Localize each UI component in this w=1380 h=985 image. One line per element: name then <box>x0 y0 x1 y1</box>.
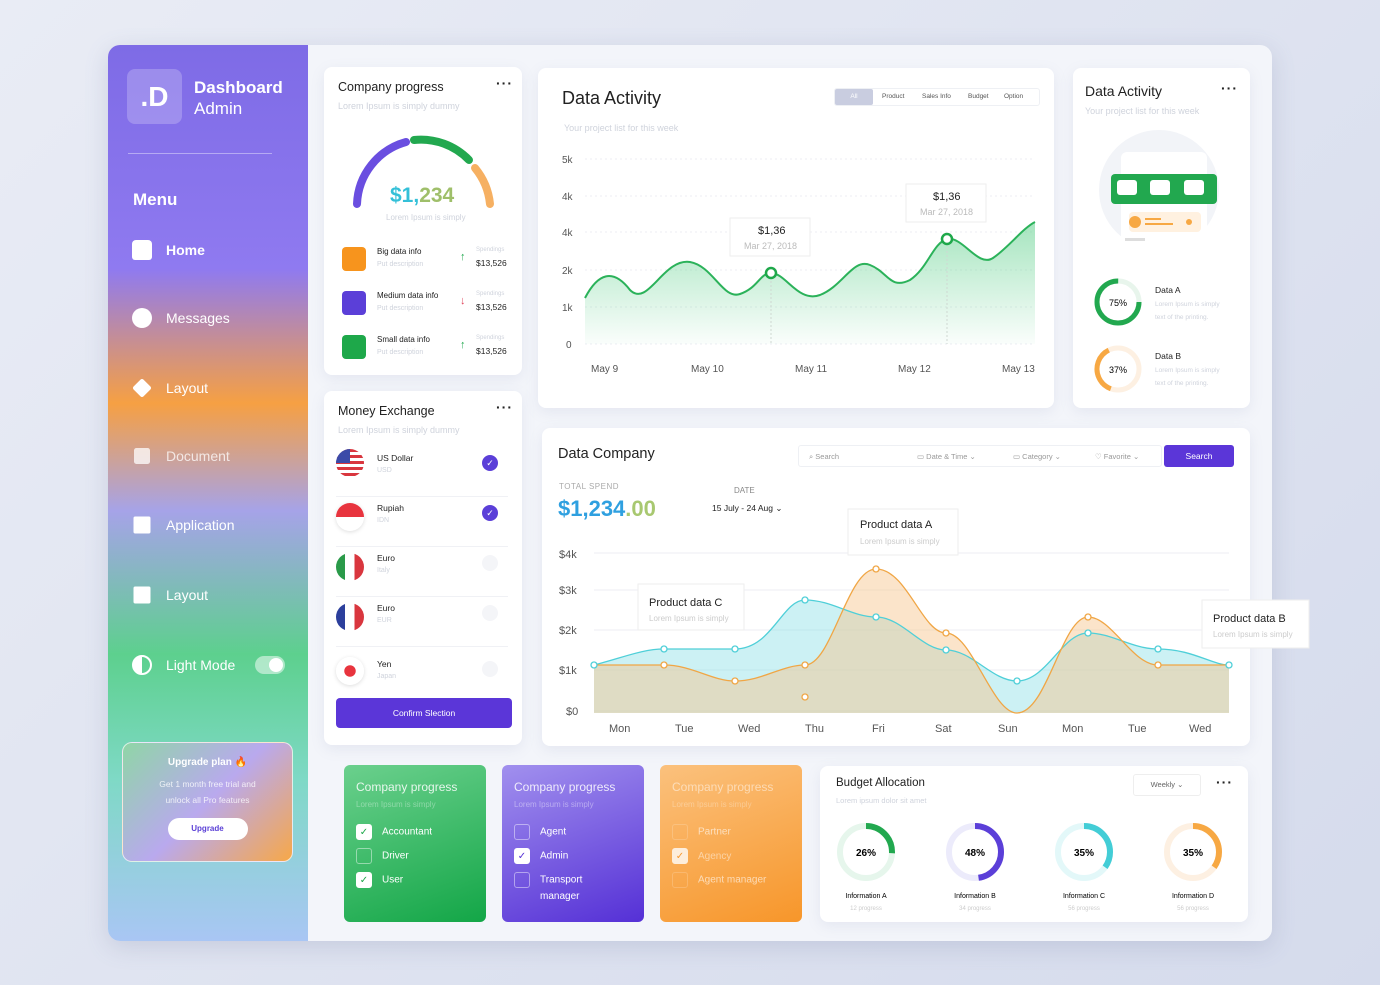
area chart: Thu <box>805 723 824 735</box>
panel: money exchange: ✓ <box>486 458 494 468</box>
text: Mar 27, 2018 <box>920 207 973 217</box>
panel: budget allocation: Budget Allocation <box>836 777 925 789</box>
search bar <box>798 445 1162 467</box>
menu item application <box>134 516 234 534</box>
list items: ↓ <box>460 295 466 307</box>
panel: budget allocation: Information D <box>1172 893 1214 900</box>
card: company progress purple: ✓ <box>518 851 526 862</box>
text: May 11 <box>795 364 827 375</box>
donut data B: 37% <box>1109 365 1127 375</box>
upgrade card: Upgrade plan 🔥 <box>168 757 247 768</box>
panel: data activity illustration: ··· <box>1221 80 1238 96</box>
text: 0 <box>566 340 572 351</box>
list items: Medium data info <box>377 291 438 300</box>
panel: budget allocation: Information A <box>845 893 887 900</box>
confirm button: Confirm Slection <box>393 708 455 718</box>
brand text: Dashboard <box>194 78 283 97</box>
gauge <box>353 136 494 208</box>
menu item home: Home <box>166 242 205 258</box>
panel: data company: DATE <box>734 486 755 495</box>
area chart: Sat <box>935 723 952 735</box>
panel: money exchange: IDN <box>377 517 389 524</box>
area chart: Wed <box>738 723 760 735</box>
list items: $13,526 <box>476 258 507 268</box>
panel: budget allocation: 26% <box>856 848 876 859</box>
card: company progress purple <box>502 765 644 922</box>
panel: budget allocation: Information B <box>954 893 996 900</box>
menu item light mode: Light Mode <box>166 657 235 673</box>
panel: company progress: ··· <box>496 75 513 91</box>
panel: data activity chart <box>538 68 1054 408</box>
logo: .D <box>140 81 168 112</box>
area chart: Wed <box>1189 723 1211 735</box>
panel: company progress: Lorem Ipsum is simply dummy <box>338 101 460 111</box>
area chart: Tue <box>675 723 694 735</box>
search bar: ▭ Category ⌄ <box>1013 452 1061 461</box>
card: company progress purple: Admin <box>540 851 568 862</box>
tabs <box>834 88 1040 106</box>
panel: money exchange: USD <box>377 467 392 474</box>
list items: $13,526 <box>476 346 507 356</box>
confirm button <box>336 698 512 728</box>
text: 5k <box>562 155 574 166</box>
menu item document <box>134 448 230 464</box>
panel: data company: Data Company <box>558 446 655 462</box>
list items <box>342 246 507 359</box>
card: company progress orange: ✓ <box>676 851 684 862</box>
panel: budget allocation: 56 progress <box>1068 906 1100 912</box>
card: company progress purple: manager <box>540 891 579 902</box>
text: 2k <box>562 266 574 277</box>
card: company progress orange: Agency <box>698 851 731 862</box>
panel: company progress: Lorem Ipsum is simply <box>386 213 466 222</box>
area chart: Product data B <box>1213 613 1286 625</box>
text: $1,36 <box>758 225 786 237</box>
text: 1k <box>562 303 574 314</box>
panel: money exchange: Lorem Ipsum is simply dummy <box>338 425 460 435</box>
panel: budget allocation: 35% <box>1074 848 1094 859</box>
panel: money exchange <box>324 391 522 745</box>
panel: money exchange: Yen <box>377 659 391 669</box>
panel: company progress: $1,234 <box>390 184 454 207</box>
panel: money exchange: US Dollar <box>377 453 413 463</box>
card: company progress orange: Company progress <box>672 780 773 794</box>
panel: money exchange: Japan <box>377 673 396 680</box>
panel: money exchange: ··· <box>496 399 513 415</box>
upgrade card: Upgrade <box>191 824 224 833</box>
panel: data activity illustration: Data B <box>1155 351 1181 361</box>
panel: budget allocation: 56 progress <box>1177 906 1209 912</box>
panel: money exchange: Rupiah <box>377 503 404 513</box>
panel: data activity illustration: Lorem Ipsum is simply <box>1155 301 1220 308</box>
panel: company progress: Company progress <box>338 80 444 94</box>
area chart: Product data C <box>649 597 722 609</box>
tabs: Option <box>1004 93 1023 100</box>
list items: ↑ <box>460 339 466 351</box>
sidebar <box>108 45 308 941</box>
illustration <box>1099 130 1219 241</box>
panel: budget allocation: ··· <box>1216 774 1233 790</box>
menu item messages <box>132 308 230 328</box>
donut data A <box>1094 278 1142 326</box>
list items: Put description <box>377 305 423 312</box>
panel: money exchange: Euro <box>377 553 395 563</box>
menu item application: Application <box>166 517 234 533</box>
menu item home <box>132 240 205 260</box>
panel: data company: 15 July - 24 Aug ⌄ <box>712 503 782 513</box>
panel: money exchange: EUR <box>377 617 392 624</box>
list items: Spendings <box>476 291 504 297</box>
list items: Small data info <box>377 335 430 344</box>
panel: company progress <box>324 67 522 375</box>
area chart: $1k <box>559 665 577 677</box>
panel: data company <box>542 428 1250 746</box>
logo <box>127 69 182 124</box>
panel: data activity illustration <box>1073 68 1250 408</box>
list items: ↑ <box>460 251 466 263</box>
card: company progress orange <box>660 765 802 922</box>
panel: budget allocation <box>820 766 1248 922</box>
card: company progress purple: Transport <box>540 875 582 886</box>
panel: money exchange: Italy <box>377 567 390 574</box>
area chart: Lorem Ipsum is simply <box>649 614 729 623</box>
area chart: Mon <box>609 723 630 735</box>
main container <box>108 45 1272 941</box>
panel: budget allocation: Weekly ⌄ <box>1151 780 1183 789</box>
panel: data company: Search <box>1186 451 1212 461</box>
panel: money exchange: Euro <box>377 603 395 613</box>
card: company progress green: ✓ <box>360 875 368 886</box>
panel: budget allocation: Information C <box>1063 893 1105 900</box>
text: May 12 <box>898 364 931 375</box>
menu heading: Menu <box>133 190 177 209</box>
text: $1,36 <box>933 191 961 203</box>
card: company progress orange: Partner <box>698 827 731 838</box>
list items: Spendings <box>476 247 504 253</box>
panel: budget allocation: 34 progress <box>959 906 991 912</box>
brand text: Admin <box>194 99 242 118</box>
list items: Big data info <box>377 247 421 256</box>
area chart: $0 <box>566 706 578 718</box>
area chart <box>559 508 1310 735</box>
tabs: Budget <box>968 93 989 100</box>
panel: budget allocation: Lorem ipsum dolor sit amet <box>836 796 926 805</box>
menu item document: Document <box>166 448 230 464</box>
menu item layout 2: Layout <box>166 587 208 603</box>
panel: money exchange: ✓ <box>486 508 494 518</box>
text: May 9 <box>591 364 619 375</box>
list items: Put description <box>377 261 423 268</box>
brand text <box>194 78 283 118</box>
area chart: Product data A <box>860 519 933 531</box>
card: company progress green: Driver <box>382 851 409 862</box>
card: company progress green <box>344 765 486 922</box>
panel: data activity chart: Data Activity <box>562 88 661 108</box>
area chart: Mon <box>1062 723 1083 735</box>
card: company progress orange: Lorem Ipsum is simply <box>672 800 752 809</box>
panel: data activity illustration: text of the printing. <box>1155 314 1208 321</box>
text: May 10 <box>691 364 724 375</box>
panel: data activity illustration: Lorem Ipsum is simply <box>1155 367 1220 374</box>
search bar: ⌕ Search <box>809 452 839 461</box>
panel: data company: $1,234.00 <box>558 496 656 521</box>
upgrade card <box>122 742 293 862</box>
search bar: ▭ Date & Time ⌄ <box>917 452 976 461</box>
card: company progress purple: Agent <box>540 827 566 838</box>
tabs: Sales Info <box>922 93 951 100</box>
search bar: ♡ Favorite ⌄ <box>1095 452 1139 461</box>
area chart: $3k <box>559 585 577 597</box>
panel: data company: TOTAL SPEND <box>559 482 619 491</box>
menu item messages: Messages <box>166 310 230 326</box>
donut data A: 75% <box>1109 298 1127 308</box>
upgrade card: unlock all Pro features <box>165 795 250 805</box>
text: 4k <box>562 228 574 239</box>
area chart: Lorem Ipsum is simply <box>860 537 940 546</box>
panel: data activity illustration: text of the printing. <box>1155 380 1208 387</box>
card: company progress purple: Lorem Ipsum is simply <box>514 800 594 809</box>
list items: $13,526 <box>476 302 507 312</box>
area chart: $4k <box>559 549 577 561</box>
panel: budget allocation: 35% <box>1183 848 1203 859</box>
card: company progress green: ✓ <box>360 827 368 838</box>
card: company progress green: Accountant <box>382 827 432 838</box>
card: company progress green: User <box>382 875 403 886</box>
area chart: Lorem Ipsum is simply <box>1213 630 1293 639</box>
panel: data activity illustration: Your project list for this week <box>1085 106 1199 116</box>
panel: money exchange: Money Exchange <box>338 404 435 418</box>
area chart: Fri <box>872 723 885 735</box>
menu item layout <box>133 379 208 397</box>
donut data B <box>1094 346 1142 392</box>
area chart: Sun <box>998 723 1018 735</box>
text: 4k <box>562 192 574 203</box>
panel: data activity illustration: Data Activity <box>1085 83 1162 99</box>
upgrade card: Get 1 month free trial and <box>159 779 256 789</box>
card: company progress orange: Agent manager <box>698 875 766 886</box>
panel: data activity chart: Your project list for this week <box>564 123 678 133</box>
list items: Put description <box>377 349 423 356</box>
tabs: Product <box>882 93 904 100</box>
card: company progress purple: Company progress <box>514 780 615 794</box>
area chart: Tue <box>1128 723 1147 735</box>
area chart: $2k <box>559 625 577 637</box>
tabs: All <box>850 93 858 100</box>
list items: Spendings <box>476 335 504 341</box>
panel: data activity illustration: Data A <box>1155 285 1181 295</box>
menu item layout 2 <box>134 586 208 604</box>
text: May 13 <box>1002 364 1035 375</box>
menu item light mode <box>132 655 285 675</box>
panel: budget allocation: 12 progress <box>850 906 882 912</box>
panel: budget allocation: 48% <box>965 848 985 859</box>
text: Mar 27, 2018 <box>744 241 797 251</box>
card: company progress green: Lorem Ipsum is simply <box>356 800 436 809</box>
card: company progress green: Company progress <box>356 780 457 794</box>
menu item layout: Layout <box>166 380 208 396</box>
